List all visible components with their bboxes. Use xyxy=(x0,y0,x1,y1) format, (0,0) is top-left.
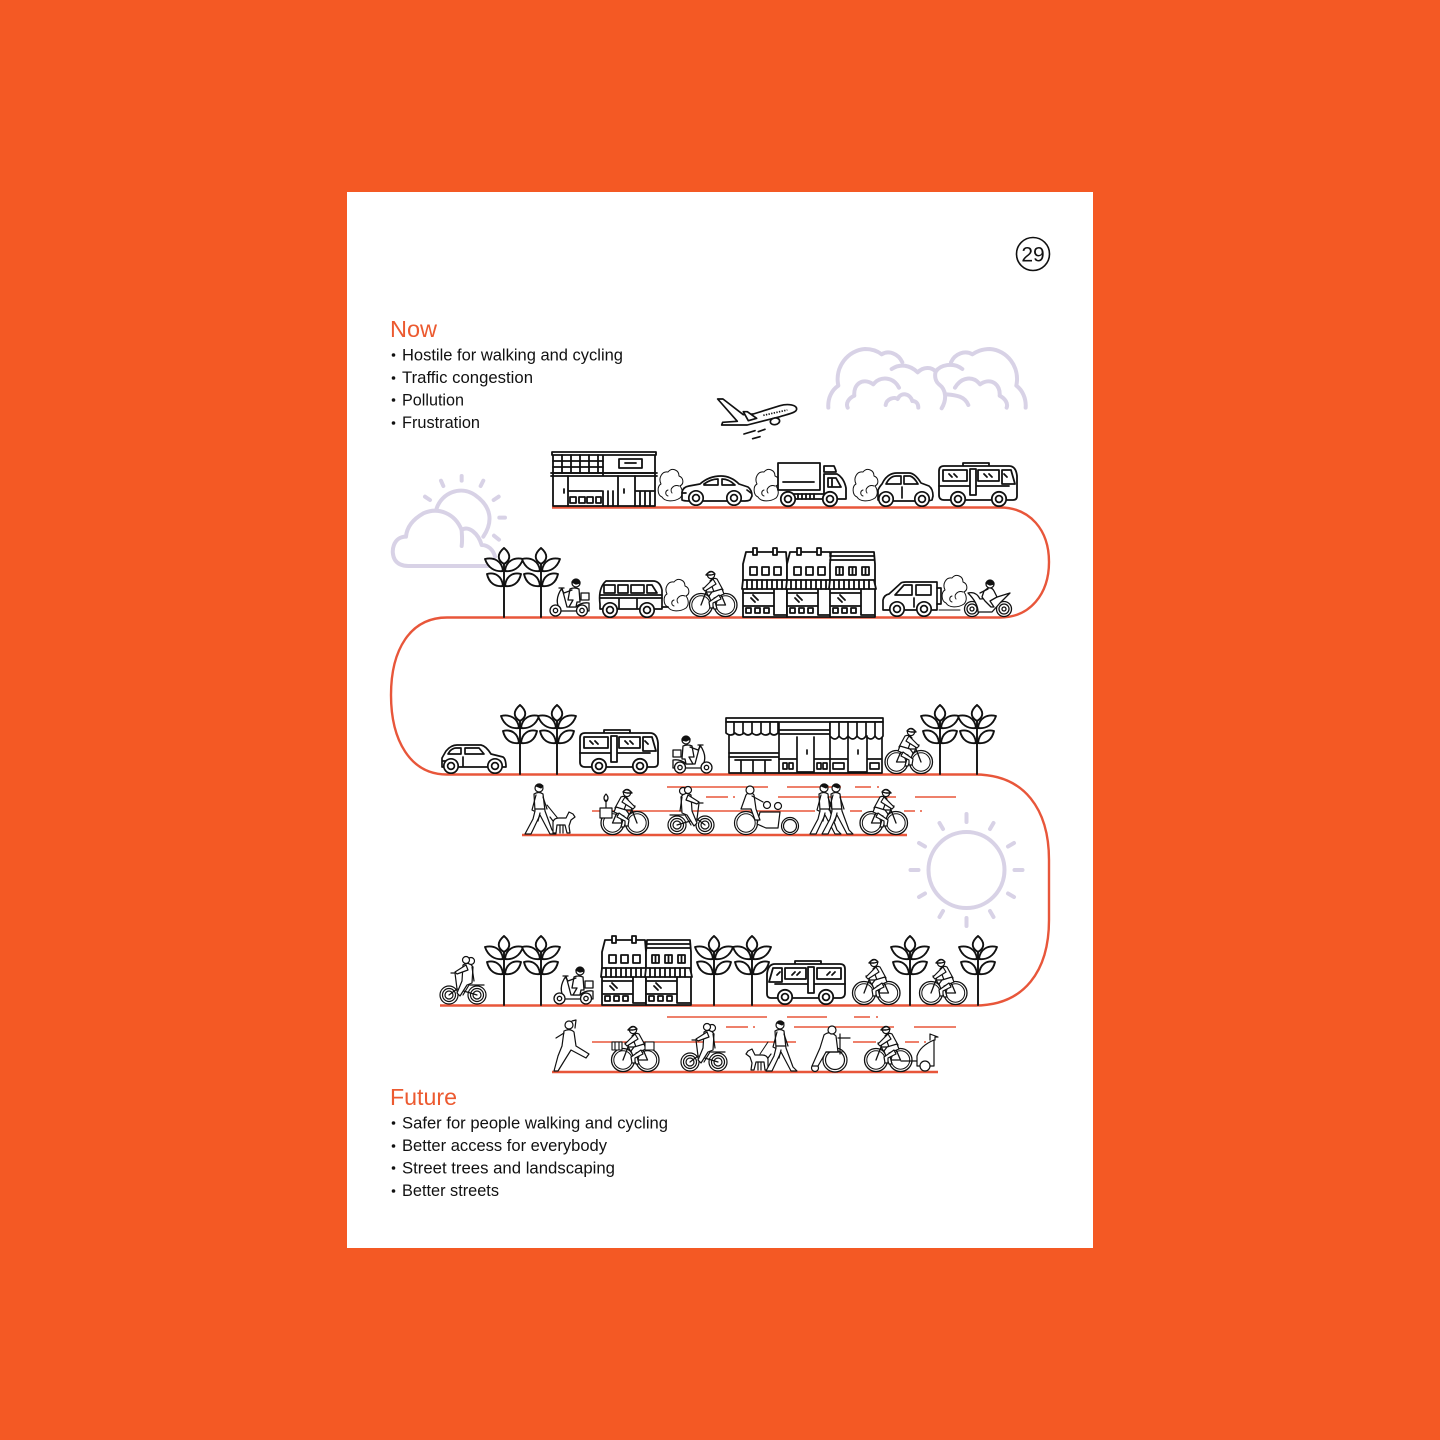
row 1: smoke and truck xyxy=(754,463,846,506)
row 2: jeep with smoke xyxy=(883,575,967,616)
row 4: bus xyxy=(767,961,845,1004)
row 4: cyclist xyxy=(852,959,900,1004)
lane 2: folding bike rider xyxy=(681,1024,727,1071)
row 1: smoke and hatchback xyxy=(853,469,933,506)
row 2: cyclist xyxy=(690,571,737,616)
list: future bullets: Safer for people walking and cycling xyxy=(402,1114,668,1132)
list: now bullets: Pollution xyxy=(402,392,464,410)
list: now bullets: Hostile for walking and cycling xyxy=(402,346,623,364)
road: lower bike lanes xyxy=(522,835,938,1072)
row 4: scooter xyxy=(554,967,593,1004)
list: future bullets: Better streets xyxy=(402,1182,499,1200)
list: future bullets: Street trees and landscaping xyxy=(402,1160,615,1178)
row 2: van with smoke xyxy=(600,579,689,617)
list: now bullets xyxy=(392,346,623,432)
lane 1: cyclist xyxy=(860,789,908,834)
lane 1: cyclist with plant xyxy=(600,789,648,834)
row 3: car xyxy=(442,745,506,773)
row 4: trees xyxy=(695,936,771,1005)
lane 1: person walking dog xyxy=(525,784,575,834)
row 3: shop block xyxy=(726,718,883,773)
row 1: shop building xyxy=(551,452,657,506)
row 3: trees xyxy=(501,705,576,774)
lane 1: cargo bike with children xyxy=(734,786,798,834)
list: future bullets xyxy=(392,1114,668,1200)
lane 2: cyclist with trailer xyxy=(864,1026,938,1072)
icon: polluted clouds xyxy=(828,349,1026,408)
icon: sun behind cloud xyxy=(393,476,505,566)
row 2: trees xyxy=(485,548,560,617)
heading: Now: Now xyxy=(390,316,437,342)
list: future bullets: Better access for everybody xyxy=(402,1137,608,1155)
dashes: speed lines xyxy=(592,787,956,1042)
row 4: trees xyxy=(485,936,560,1005)
road: winding red line xyxy=(391,508,1049,1006)
row 3: cyclist xyxy=(885,728,932,774)
row 4: tree xyxy=(891,936,929,1005)
row 2: motorcycle xyxy=(964,580,1012,616)
row 2: row houses xyxy=(742,548,876,617)
lane 2: wheelchair user xyxy=(812,1026,850,1072)
page number badge: 29 xyxy=(1021,244,1045,266)
row 4: row houses xyxy=(601,936,692,1005)
row 2: scooter xyxy=(550,579,589,616)
row 4: tree xyxy=(959,936,997,1005)
lane 2: runner xyxy=(554,1020,589,1071)
page number badge xyxy=(1016,238,1050,270)
row 3: scooter xyxy=(673,736,712,773)
icon: airplane xyxy=(718,399,797,439)
lane 2: dog and walker xyxy=(746,1021,797,1071)
row 4: folding bike rider xyxy=(440,956,486,1004)
row 1: smoke and car xyxy=(658,469,752,505)
lane 2: cyclist with basket xyxy=(612,1026,659,1072)
row 4: cyclist xyxy=(920,959,967,1004)
list: now bullets: Traffic congestion xyxy=(402,369,533,387)
lane 1: couple walking xyxy=(810,784,853,834)
row 3: bus xyxy=(580,730,658,773)
icon: sun xyxy=(910,814,1022,926)
row 3: trees right xyxy=(921,705,996,774)
heading: Future: Future xyxy=(390,1084,457,1110)
list: now bullets: Frustration xyxy=(402,414,480,432)
panel: white page xyxy=(347,192,1093,1248)
street scene icons xyxy=(440,452,1017,1072)
lane 1: folding bike rider xyxy=(668,786,714,834)
row 1: bus xyxy=(939,463,1017,506)
